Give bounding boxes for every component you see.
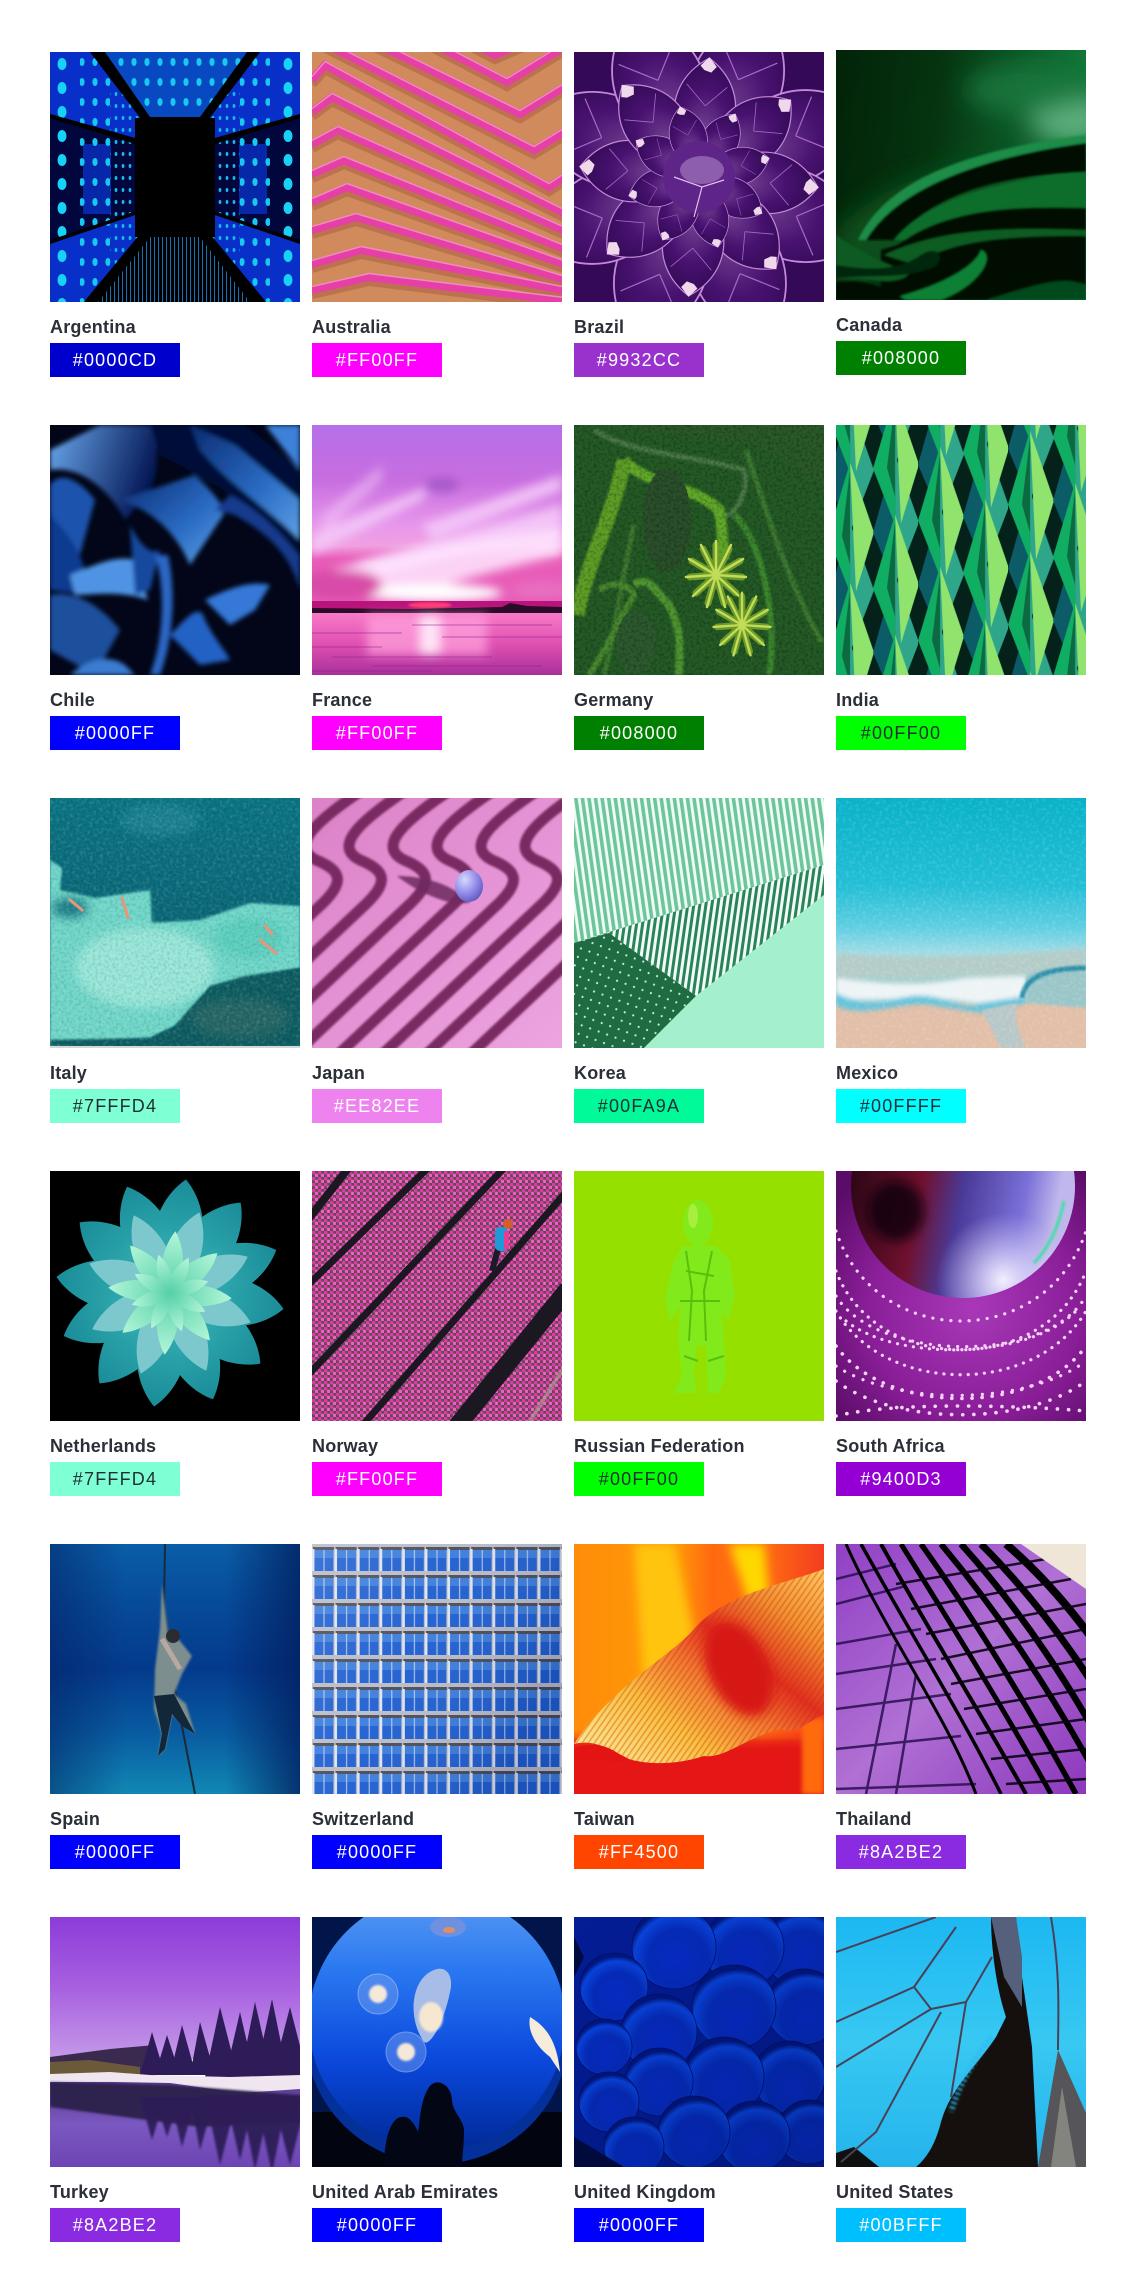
colour swatch: #7FFFD4 [73, 1096, 157, 1116]
panel: Norway [312, 1171, 562, 1496]
colour swatch: #FF00FF [336, 1469, 418, 1489]
colour swatch: #0000CD [73, 350, 157, 370]
panel: United States [836, 1917, 1086, 2242]
photo: butterfly wing [836, 1917, 1086, 2167]
panel: Chile [50, 425, 300, 750]
colour swatch [574, 1835, 704, 1869]
country label: Chile [50, 690, 95, 710]
photo: swimmers over turquoise reef [50, 798, 300, 1048]
colour swatch [50, 2208, 180, 2242]
panel: Turkey [50, 1917, 300, 2242]
colour swatch: #00BFFF [859, 2215, 943, 2235]
colour swatch: #008000 [600, 723, 678, 743]
country label: Australia [312, 317, 391, 337]
country label: South Africa [836, 1436, 945, 1456]
panel: Canada [836, 50, 1086, 375]
colour swatch [50, 1835, 180, 1869]
colour swatch: #008000 [862, 348, 940, 368]
colour swatch [312, 716, 442, 750]
photo: aerial rice terraces and palm trees [574, 425, 824, 675]
photo: purple wall with black lattice shadow [836, 1544, 1086, 1794]
country label: Argentina [50, 317, 136, 337]
colour swatch [836, 1462, 966, 1496]
country label: Norway [312, 1436, 378, 1456]
colour swatch: #0000FF [337, 1842, 417, 1862]
panel: France [312, 425, 562, 750]
colour swatch: #0000FF [599, 2215, 679, 2235]
country label: Japan [312, 1063, 365, 1083]
panel: Mexico [836, 798, 1086, 1123]
photo: freediver on rope underwater [50, 1544, 300, 1794]
country label: Brazil [574, 317, 624, 337]
country label: Taiwan [574, 1809, 635, 1829]
panel: Japan [312, 798, 562, 1123]
colour swatch [50, 1089, 180, 1123]
colour swatch [312, 1462, 442, 1496]
colour swatch: #0000FF [75, 1842, 155, 1862]
country label: Germany [574, 690, 653, 710]
colour swatch: #00FF00 [861, 723, 941, 743]
photo: pink wavy shadow stripes with ball [312, 798, 562, 1048]
colour swatch [50, 343, 180, 377]
colour swatch [312, 1089, 442, 1123]
panel: Thailand [836, 1544, 1086, 1869]
colour swatch: #8A2BE2 [859, 1842, 943, 1862]
photo: green striped paper geometry [574, 798, 824, 1048]
photo: pink and tan chevron ridges [312, 52, 562, 302]
colour swatch: #0000FF [75, 723, 155, 743]
panel: United Kingdom [574, 1917, 824, 2242]
panel: Argentina [50, 52, 300, 377]
photo: orange and red tulip petal [574, 1544, 824, 1794]
panel: United Arab Emirates [312, 1917, 562, 2242]
colour swatch [574, 1089, 704, 1123]
colour swatch: #7FFFD4 [73, 1469, 157, 1489]
colour swatch: #9400D3 [860, 1469, 942, 1489]
panel: Spain [50, 1544, 300, 1869]
country label: India [836, 690, 879, 710]
photo: green astronaut figure on lime [574, 1171, 824, 1421]
panel: Australia [312, 52, 562, 377]
photo: purple succulent [574, 52, 824, 302]
photo: green satin [836, 50, 1086, 300]
panel: Russian Federation [574, 1171, 824, 1496]
colour swatch [312, 2208, 442, 2242]
panel: South Africa [836, 1171, 1086, 1496]
colour swatch [574, 1462, 704, 1496]
colour swatch: #FF00FF [336, 723, 418, 743]
photo: purple sky, pine trees and lake [50, 1917, 300, 2167]
colour swatch [574, 343, 704, 377]
colour swatch [574, 716, 704, 750]
country label: Russian Federation [574, 1436, 745, 1456]
country label: Italy [50, 1063, 87, 1083]
photo: aerial tulip rows with person [312, 1171, 562, 1421]
colour swatch: #EE82EE [334, 1096, 420, 1116]
country label: United Arab Emirates [312, 2182, 498, 2202]
photo: magenta sunset over water [312, 425, 562, 675]
colour swatch [836, 716, 966, 750]
colour swatch: #00FA9A [598, 1096, 680, 1116]
panel: Taiwan [574, 1544, 824, 1869]
colour swatch [836, 1089, 966, 1123]
panel: Brazil [574, 52, 824, 377]
colour swatch: #FF00FF [336, 350, 418, 370]
colour swatch: #0000FF [337, 2215, 417, 2235]
panel: India [836, 425, 1086, 750]
colour swatch [836, 1835, 966, 1869]
photo: teal paper flower on black [50, 1171, 300, 1421]
country label: Korea [574, 1063, 626, 1083]
colour swatch: #FF4500 [599, 1842, 679, 1862]
colour swatch: #9932CC [597, 350, 681, 370]
country label: Turkey [50, 2182, 109, 2202]
country label: Spain [50, 1809, 100, 1829]
country label: United States [836, 2182, 954, 2202]
colour swatch [836, 2208, 966, 2242]
colour swatch [312, 1835, 442, 1869]
panel: Germany [574, 425, 824, 750]
colour swatch [312, 343, 442, 377]
photo: blue light tunnel [50, 52, 300, 302]
colour swatch [50, 1462, 180, 1496]
photo: green and teal faceted facade [836, 425, 1086, 675]
photo: aerial beach shoreline [836, 798, 1086, 1048]
country label: Canada [836, 315, 902, 335]
country label: Mexico [836, 1063, 898, 1083]
photo: disco ball with purple light dots [836, 1171, 1086, 1421]
panel: Netherlands [50, 1171, 300, 1496]
photo: blue window grid facade [312, 1544, 562, 1794]
country label: France [312, 690, 372, 710]
colour swatch: #8A2BE2 [73, 2215, 157, 2235]
photo: blue feathers [574, 1917, 824, 2167]
colour swatch: #00FFFF [860, 1096, 942, 1116]
panel: Switzerland [312, 1544, 562, 1869]
country label: Netherlands [50, 1436, 156, 1456]
country label: Thailand [836, 1809, 912, 1829]
photo: jellyfish aquarium with children [312, 1917, 562, 2167]
photo: blue ribbons [50, 425, 300, 675]
colour swatch: #00FF00 [599, 1469, 679, 1489]
colour swatch [836, 341, 966, 375]
colour swatch [50, 716, 180, 750]
panel: Italy [50, 798, 300, 1123]
country label: Switzerland [312, 1809, 414, 1829]
colour swatch [574, 2208, 704, 2242]
country label: United Kingdom [574, 2182, 716, 2202]
panel: Korea [574, 798, 824, 1123]
